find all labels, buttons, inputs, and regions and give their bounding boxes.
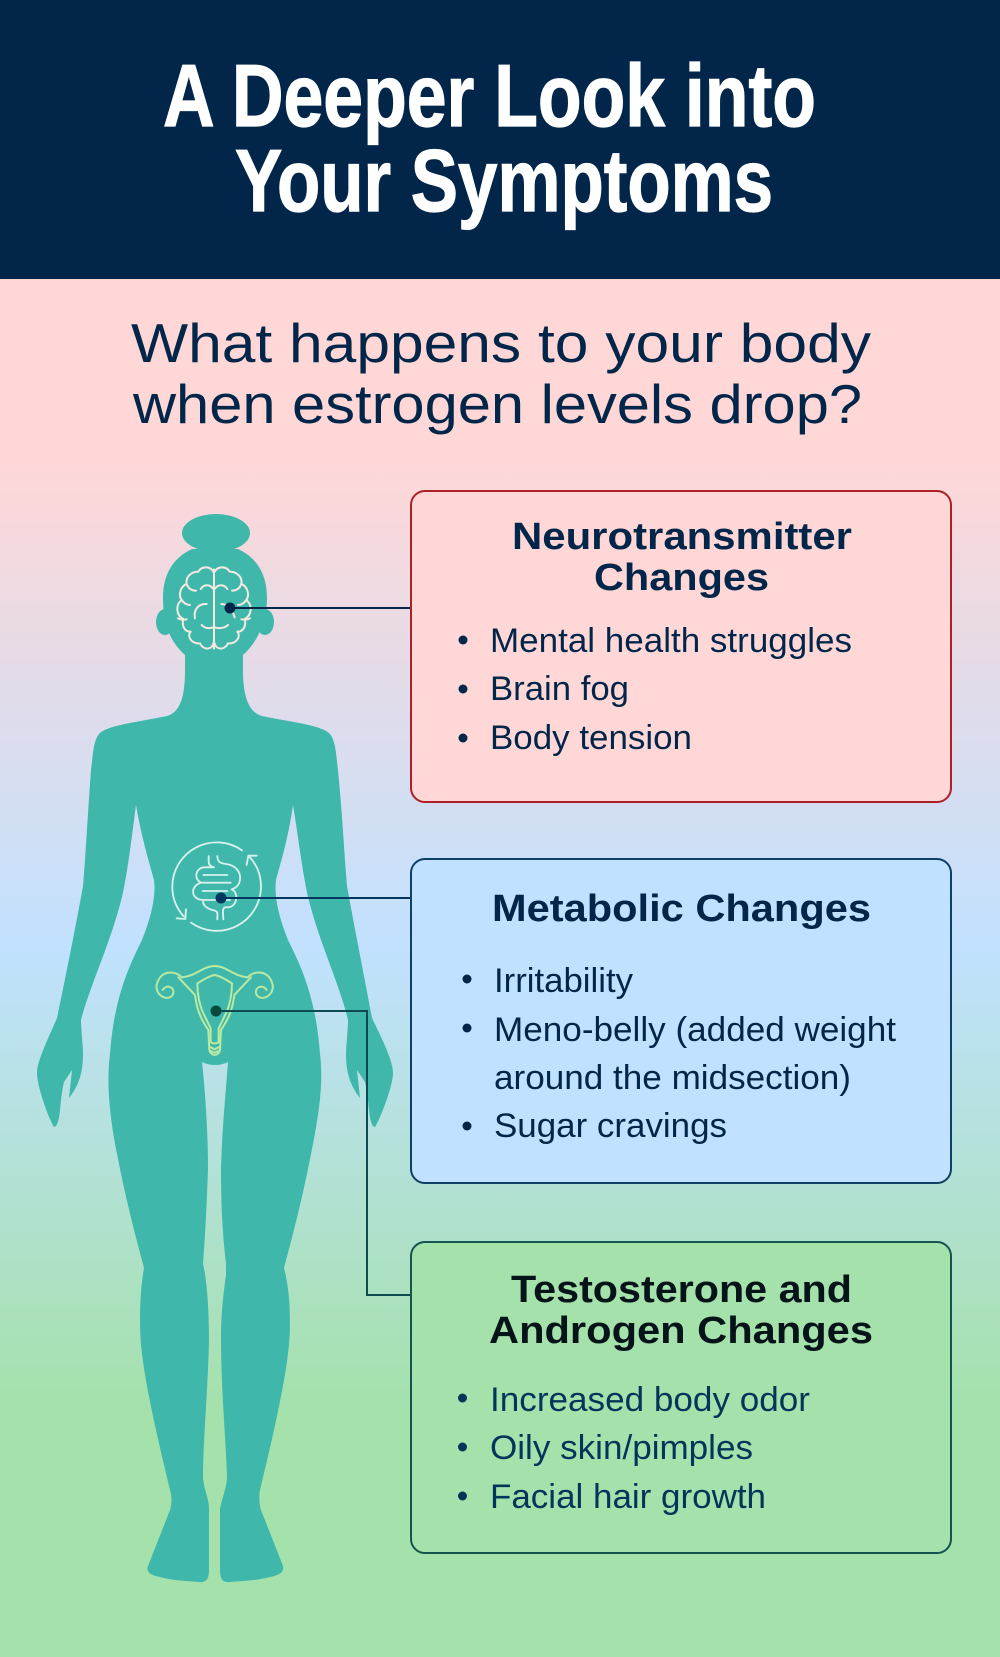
bullet list: Body tension <box>490 719 692 757</box>
header band with title: Your Symptoms <box>235 131 773 230</box>
bullet list <box>462 962 896 1145</box>
card heading: Neurotransmitter <box>512 516 852 558</box>
icon: uterus <box>157 966 273 1055</box>
connector: brain to neurotransmitter card <box>224 602 412 614</box>
bullet list: Irritability <box>494 962 634 1000</box>
icon: intestines in cycle arrows <box>172 842 261 931</box>
body silhouette <box>37 514 393 1582</box>
card heading: Testosterone and <box>511 1269 852 1311</box>
header band with title <box>0 0 1000 279</box>
bullet list: Increased body odor <box>490 1381 810 1419</box>
card heading <box>512 516 852 599</box>
subtitle: when estrogen levels drop? <box>132 373 862 435</box>
bullet list: around the midsection) <box>494 1059 851 1097</box>
bullet list: Mental health struggles <box>490 622 852 660</box>
panel: testosterone and androgen changes <box>411 1242 951 1553</box>
connector: intestines to metabolic card <box>216 892 412 904</box>
card heading: Changes <box>594 557 769 599</box>
subtitle <box>131 312 872 435</box>
icon: brain <box>177 567 251 649</box>
bullet list: Facial hair growth <box>490 1478 766 1516</box>
subtitle: What happens to your body <box>131 312 872 374</box>
panel: metabolic changes <box>411 859 951 1183</box>
connector: uterus to testosterone card <box>210 1006 412 1295</box>
card heading: Androgen Changes <box>489 1310 873 1352</box>
bullet list <box>458 1381 810 1516</box>
bullet list: Oily skin/pimples <box>490 1429 753 1467</box>
bullet list: Meno-belly (added weight <box>494 1011 896 1049</box>
card heading <box>489 1269 873 1352</box>
card heading: Metabolic Changes <box>492 888 871 930</box>
header band with title: A Deeper Look into <box>163 46 816 145</box>
bullet list <box>458 622 852 757</box>
bullet list: Brain fog <box>490 670 629 708</box>
panel: neurotransmitter changes <box>411 491 951 802</box>
bullet list: Sugar cravings <box>494 1107 727 1145</box>
